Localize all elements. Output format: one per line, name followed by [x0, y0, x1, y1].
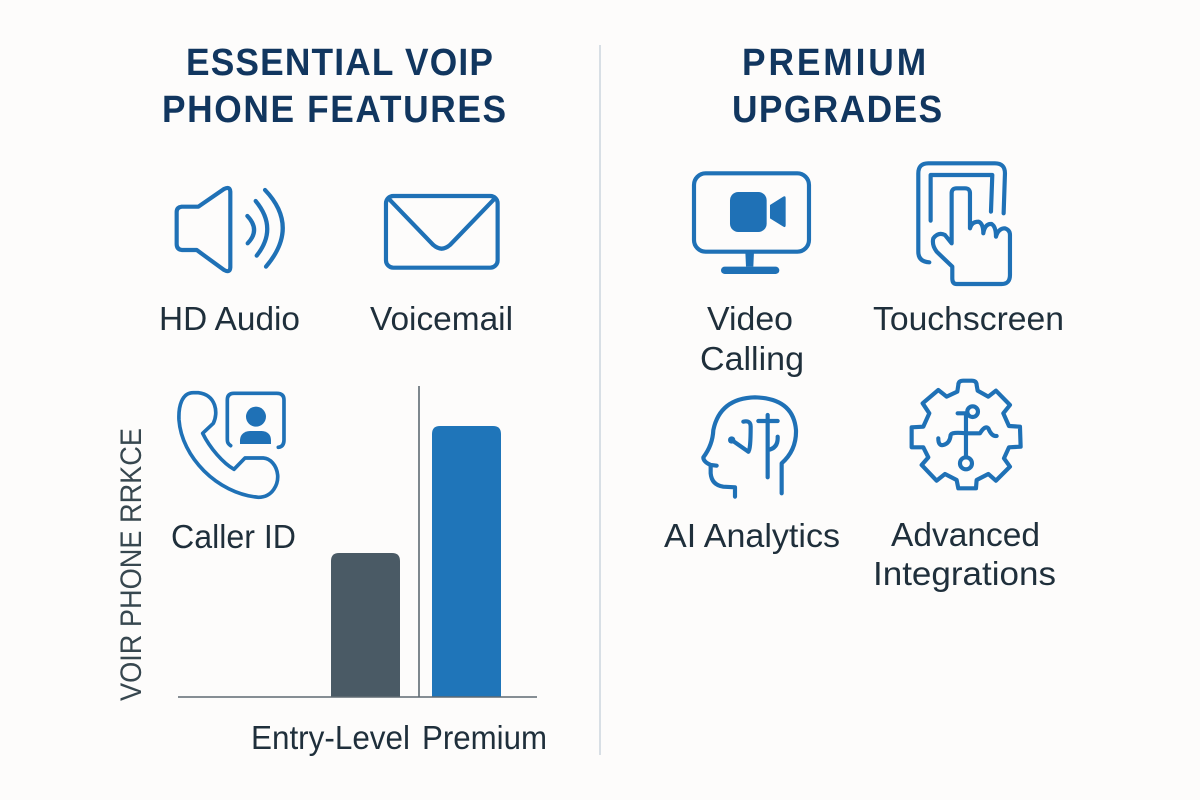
label: Video Calling: [700, 300, 804, 377]
icon: integration gear: [912, 381, 1021, 488]
bar: entry-level: [331, 553, 400, 697]
heading: essential VoIP phone features: [162, 41, 506, 130]
icon: video monitor: [694, 173, 809, 274]
label: Video Calling: Calling: [700, 340, 804, 377]
heading: premium upgrades: [732, 41, 942, 130]
bar chart: VoIP phone price: [115, 386, 547, 756]
label: Touchscreen: Touchscreen: [873, 300, 1064, 337]
label: Advanced Integrations: Advanced: [891, 516, 1040, 553]
label: Advanced Integrations: [873, 516, 1056, 592]
label: Voicemail: Voicemail: [370, 300, 513, 337]
label: Video Calling: Video: [707, 300, 793, 337]
icon: envelope: [386, 196, 498, 268]
label: AI Analytics: AI Analytics: [664, 517, 840, 554]
heading: premium upgrades: UPGRADES: [732, 88, 942, 130]
label: Advanced Integrations: Integrations: [873, 555, 1056, 592]
panel: essential features: [115, 41, 547, 756]
heading: essential VoIP phone features: ESSENTIAL VOIP: [186, 41, 493, 83]
label: Premium: Premium: [422, 719, 547, 756]
label: HD Audio: HD Audio: [159, 300, 300, 337]
bar: premium: [432, 426, 501, 697]
label: Caller ID: Caller ID: [171, 518, 296, 555]
icon: touchscreen hand: [918, 163, 1010, 284]
heading: premium upgrades: PREMIUM: [742, 41, 926, 83]
panel: premium upgrades: [664, 41, 1064, 592]
label: Entry-Level: Entry-Level: [251, 719, 410, 756]
heading: essential VoIP phone features: PHONE FEATURES: [162, 88, 506, 130]
icon: phone with contact: [179, 393, 284, 497]
icon: AI head: [703, 397, 796, 497]
y axis title: VOIR PHONE RRKCE: [115, 428, 148, 701]
icon: speaker: [177, 188, 283, 271]
